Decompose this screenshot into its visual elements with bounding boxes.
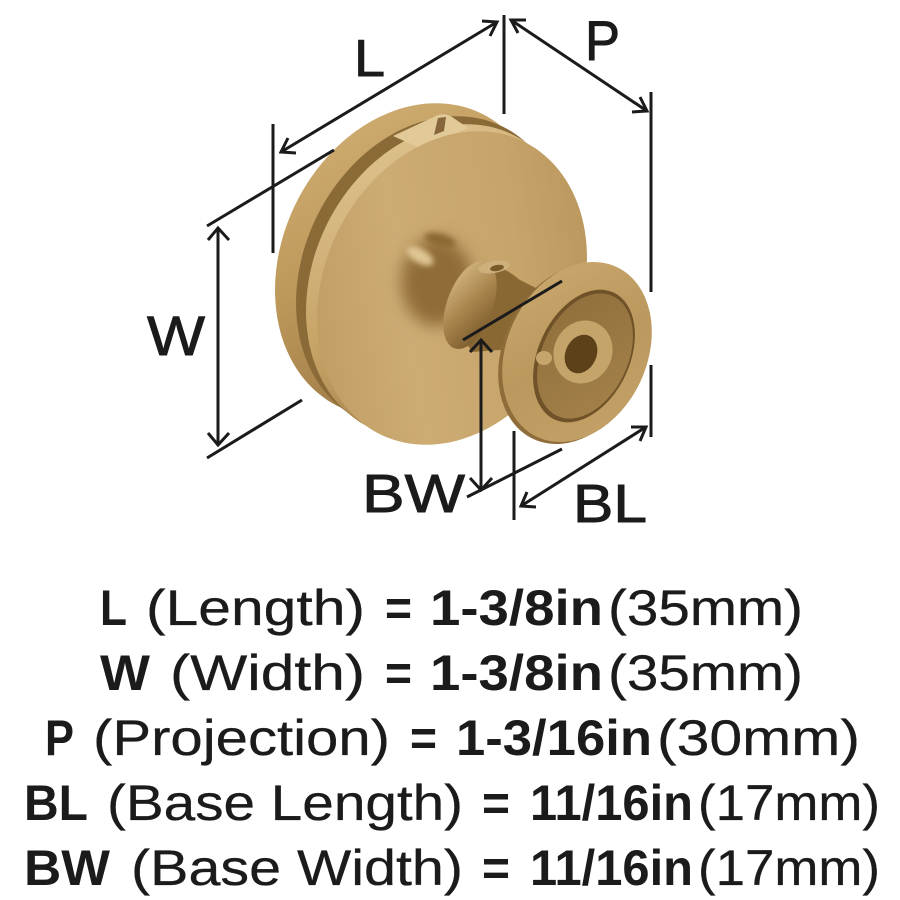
back plate bbox=[224, 58, 596, 462]
spec: projection: = bbox=[410, 710, 437, 766]
groove bbox=[245, 71, 617, 475]
spec: base length: = bbox=[482, 775, 510, 831]
spec: base length: (17mm) bbox=[698, 775, 880, 831]
L extension lines bbox=[207, 15, 504, 253]
spec: length: L bbox=[100, 580, 127, 636]
spec: width: = bbox=[385, 645, 412, 701]
diagram label BL: BL bbox=[573, 474, 647, 534]
face shadow bbox=[401, 238, 473, 326]
L dimension arrow bbox=[281, 21, 497, 153]
spec: base width bbox=[24, 840, 880, 896]
dimension lines bbox=[207, 15, 651, 520]
centre hole bbox=[558, 329, 604, 379]
diagram label W: W bbox=[147, 304, 205, 367]
spec: base length bbox=[24, 775, 880, 831]
spec: base width: BW bbox=[24, 840, 111, 896]
spec: base width: (Base Width) bbox=[131, 840, 463, 896]
spec: projection: 1-3/16in bbox=[456, 710, 652, 766]
diagram label L: L bbox=[354, 30, 385, 88]
base recess bbox=[513, 273, 655, 439]
stem bbox=[452, 265, 560, 352]
W dimension arrow bbox=[207, 228, 302, 458]
knob illustration bbox=[224, 58, 680, 490]
spec: projection bbox=[45, 710, 860, 766]
spec: length: = bbox=[385, 580, 412, 636]
base disc bbox=[474, 237, 680, 467]
spec: base length: BL bbox=[24, 775, 88, 831]
spec: length: (Length) bbox=[146, 580, 365, 636]
spec: width: W bbox=[100, 645, 151, 701]
spec: width: (35mm) bbox=[608, 645, 803, 701]
spec: base width: (17mm) bbox=[698, 840, 880, 896]
spec: width: (Width) bbox=[170, 645, 365, 701]
mounting notch bbox=[393, 114, 468, 148]
spec: base length: (Base Length) bbox=[107, 775, 463, 831]
spec: width: 1-3/8in bbox=[430, 645, 603, 701]
shadow dark top bbox=[423, 230, 457, 250]
inner rim bbox=[255, 79, 627, 483]
spec: projection: (Projection) bbox=[93, 710, 390, 766]
spec: length: 1-3/8in bbox=[430, 580, 603, 636]
base disc edge bbox=[470, 239, 676, 469]
spec: length bbox=[100, 580, 803, 636]
spec list bbox=[24, 580, 880, 896]
front face bbox=[266, 86, 638, 490]
BW dimension arrow bbox=[463, 281, 562, 497]
screw pin bbox=[536, 351, 552, 365]
spec: base length: 11/16in bbox=[530, 775, 693, 831]
spec: projection: (30mm) bbox=[657, 710, 860, 766]
face highlight bbox=[404, 242, 436, 270]
diagram label P: P bbox=[585, 9, 620, 72]
spec: projection: P bbox=[45, 710, 74, 766]
P extension lines bbox=[650, 92, 652, 437]
spec: length: (35mm) bbox=[608, 580, 803, 636]
BL dimension arrow bbox=[514, 427, 646, 520]
diagram label BW: BW bbox=[362, 464, 465, 524]
centre ring bbox=[543, 311, 623, 393]
P dimension arrow bbox=[511, 20, 647, 112]
spec: base width: = bbox=[482, 840, 510, 896]
spec: width bbox=[100, 645, 803, 701]
stem collar bbox=[433, 254, 507, 356]
spec: base width: 11/16in bbox=[530, 840, 693, 896]
